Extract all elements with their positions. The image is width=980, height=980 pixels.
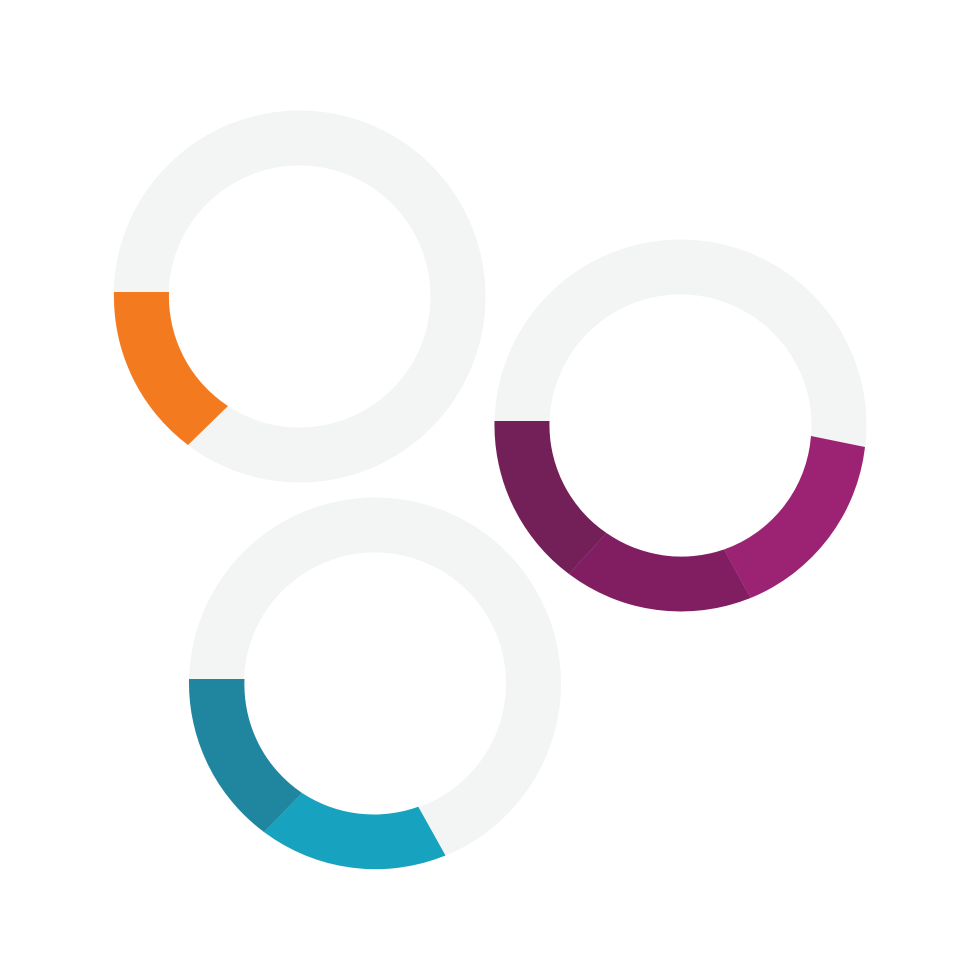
segment: orange [114, 292, 228, 445]
segment: dark purple [494, 421, 606, 574]
donut chart: orange [114, 138, 458, 455]
track ring: purple chart [522, 267, 839, 584]
track ring: teal chart [216, 525, 534, 842]
segment: bright purple [724, 436, 865, 598]
donut chart: teal [189, 525, 534, 869]
segment: medium purple [569, 533, 750, 611]
segment: dark teal [189, 679, 302, 832]
track ring: orange chart [141, 138, 458, 455]
donut chart: purple [494, 267, 865, 611]
segment: bright teal [264, 793, 446, 869]
